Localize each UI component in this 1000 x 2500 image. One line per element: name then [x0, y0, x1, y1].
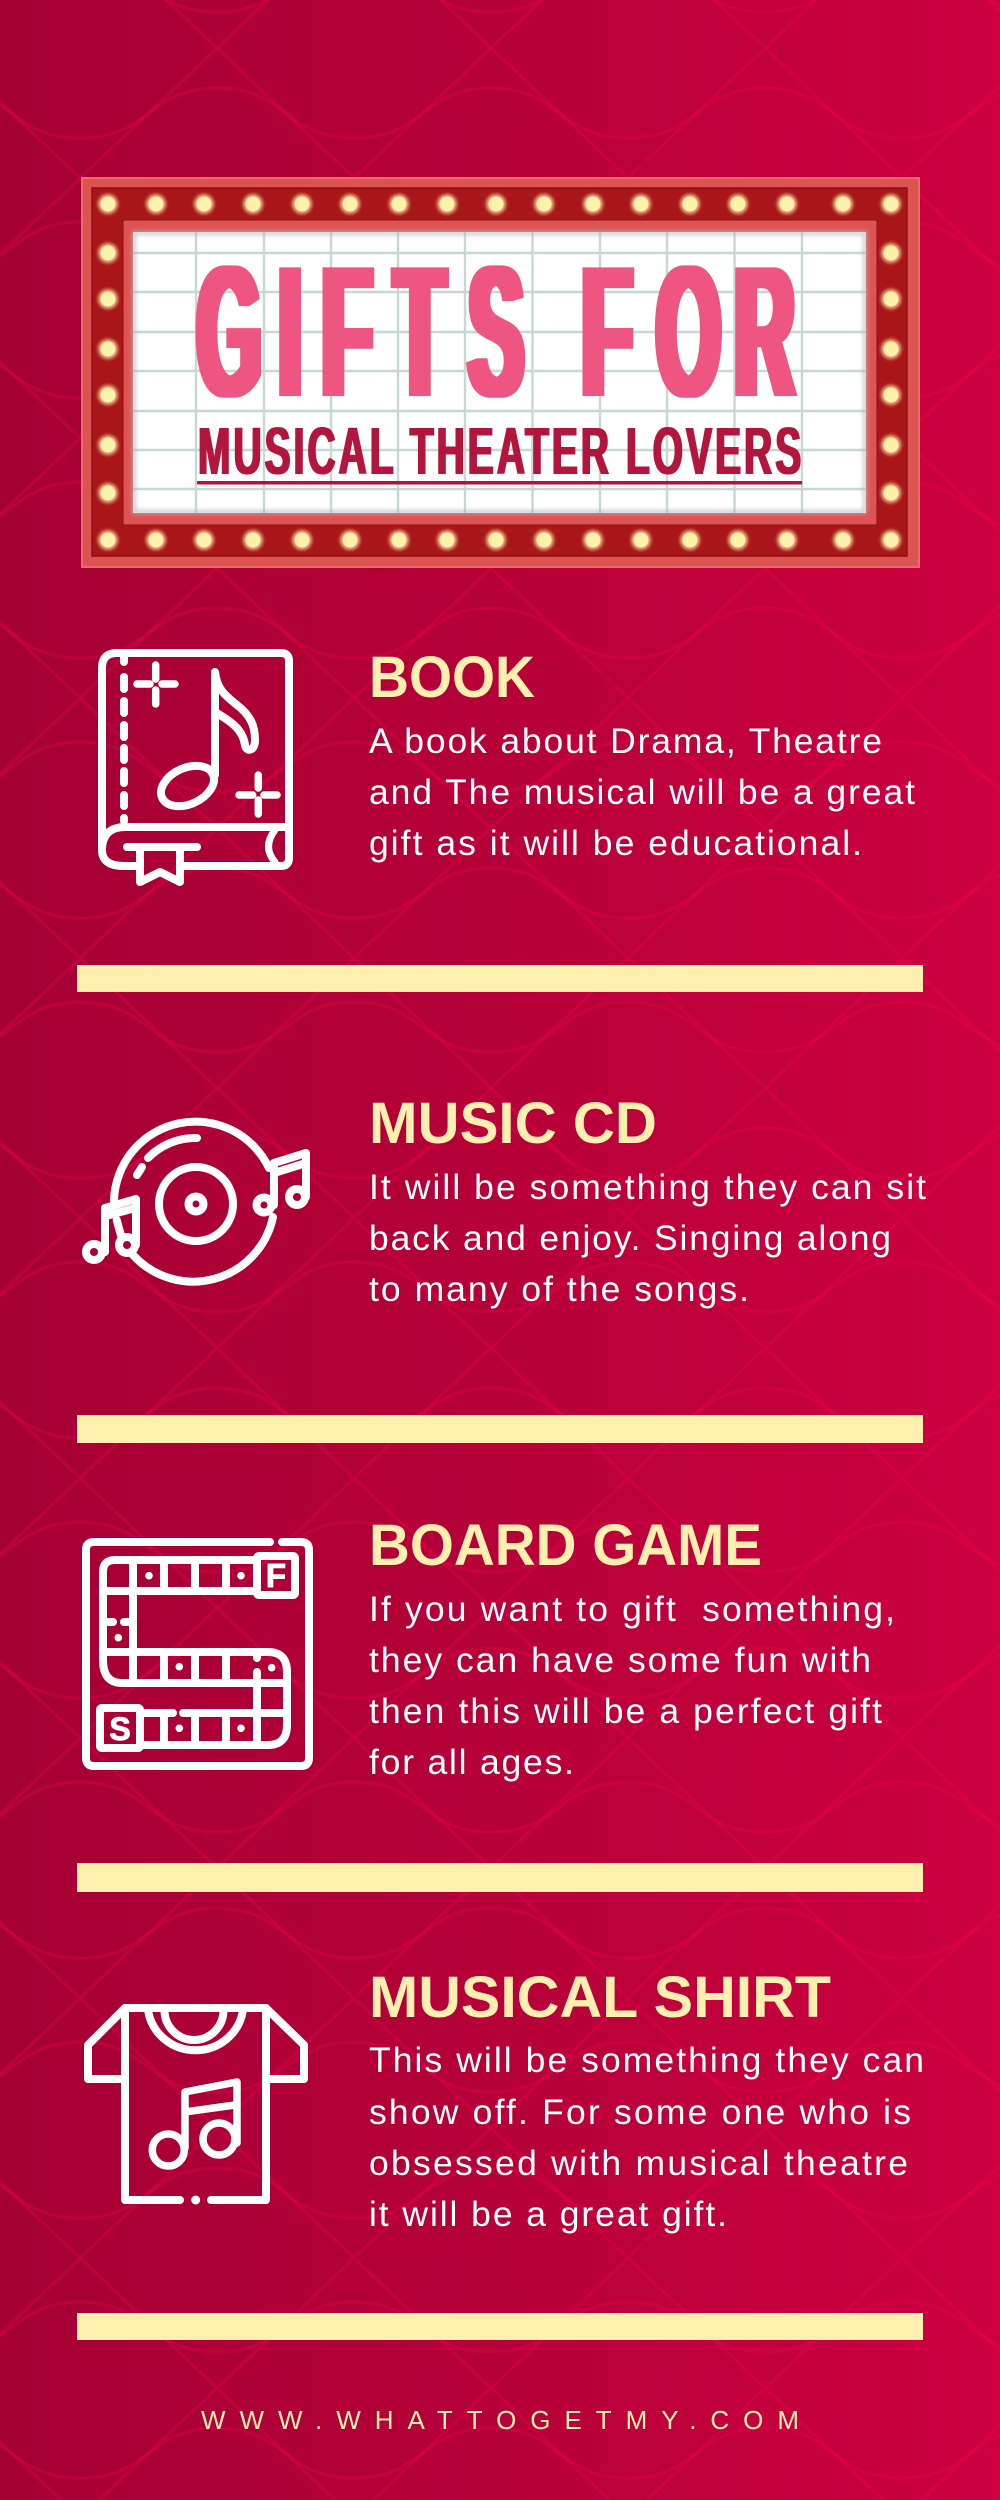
- description: It will be something they can sit: [369, 1167, 926, 1207]
- description: [369, 1589, 895, 1782]
- description: obsessed with musical theatre: [369, 2143, 908, 2183]
- divider bar: [77, 2313, 923, 2340]
- divider bar: [77, 1863, 923, 1892]
- description: [369, 721, 915, 863]
- description: A book about Drama, Theatre: [369, 721, 882, 761]
- icon: board game: F: [266, 1557, 286, 1594]
- subtitle underline: [197, 481, 802, 484]
- section: book: [102, 645, 915, 882]
- icon: board game: [86, 1542, 309, 1766]
- description: This will be something they can: [369, 2040, 924, 2080]
- description: [369, 2040, 924, 2234]
- section: board game: [86, 1513, 895, 1782]
- description: back and enjoy. Singing along: [369, 1218, 891, 1258]
- heading: MUSICAL SHIRT: [369, 1965, 831, 2030]
- heading: MUSIC CD: [369, 1091, 657, 1156]
- description: If you want to gift something,: [369, 1589, 895, 1629]
- subtitle: musical theater lovers: MUSICAL THEATER LOVERS: [198, 413, 801, 489]
- description: for all ages.: [369, 1742, 574, 1782]
- divider bar: [77, 965, 923, 992]
- icon: board game: S: [109, 1711, 131, 1747]
- divider bar: [77, 1415, 923, 1443]
- description: [369, 1167, 926, 1309]
- white letter board: [133, 232, 866, 513]
- description: then this will be a perfect gift: [369, 1691, 882, 1731]
- icon: t-shirt with notes: [88, 2008, 304, 2204]
- section: music cd: [86, 1091, 926, 1309]
- footer url: WWW.WHATTOGETMY.COM: [201, 2405, 799, 2435]
- heading: BOARD GAME: [369, 1513, 762, 1578]
- section: musical shirt: [88, 1965, 924, 2234]
- marquee sign: [82, 178, 919, 567]
- inner frame: [123, 220, 877, 525]
- icon: book with music note: [102, 653, 289, 882]
- description: gift as it will be educational.: [369, 823, 862, 863]
- title: gifts for: GIFTS FOR: [197, 226, 794, 436]
- description: they can have some fun with: [369, 1640, 871, 1680]
- description: show off. For some one who is: [369, 2092, 911, 2132]
- description: to many of the songs.: [369, 1269, 749, 1309]
- heading: BOOK: [369, 645, 535, 710]
- marquee lights: [98, 194, 901, 550]
- icon: cd with notes: [86, 1122, 306, 1282]
- description: it will be a great gift.: [369, 2194, 727, 2234]
- description: and The musical will be a great: [369, 772, 915, 812]
- outer frame: [82, 178, 919, 567]
